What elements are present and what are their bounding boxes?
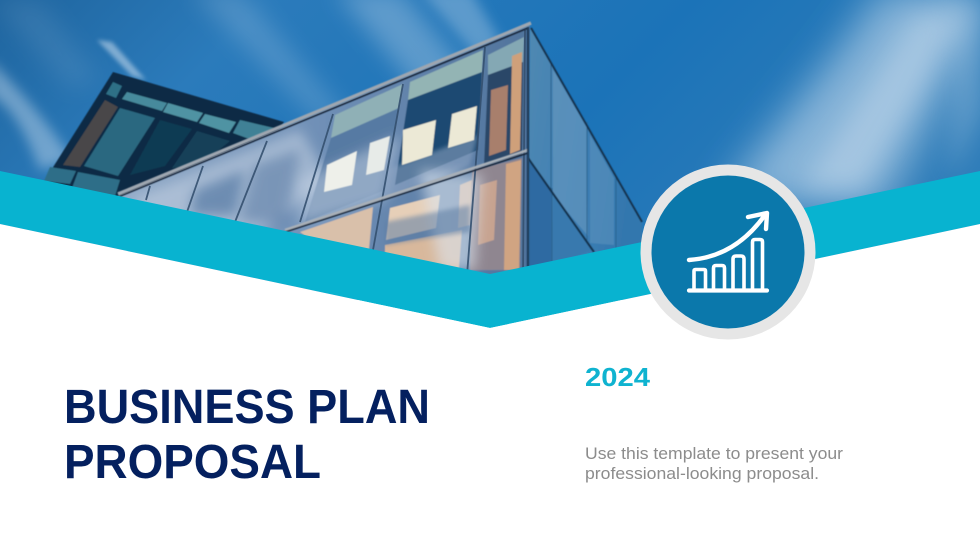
title: PROPOSAL: [64, 436, 321, 489]
front building glass facade: [118, 25, 530, 290]
badge inner circle: [652, 176, 804, 328]
description text: professional-looking proposal.: [585, 465, 819, 483]
teal chevron band: [0, 171, 980, 328]
sky photo background: [0, 0, 980, 300]
description text: Use this template to present your: [585, 445, 844, 463]
title: BUSINESS PLAN: [64, 381, 430, 434]
icon badge: growth chart: [640, 164, 816, 340]
year label: 2024: [585, 364, 651, 392]
back building block: [44, 72, 284, 250]
front building right side facade: [528, 28, 642, 290]
icon: bar chart with rising arrow: [689, 213, 767, 290]
badge outer ring: [640, 164, 816, 340]
white lower panel: [0, 224, 980, 551]
building in the photo: [44, 23, 642, 290]
roof and floor edges: [118, 23, 531, 275]
